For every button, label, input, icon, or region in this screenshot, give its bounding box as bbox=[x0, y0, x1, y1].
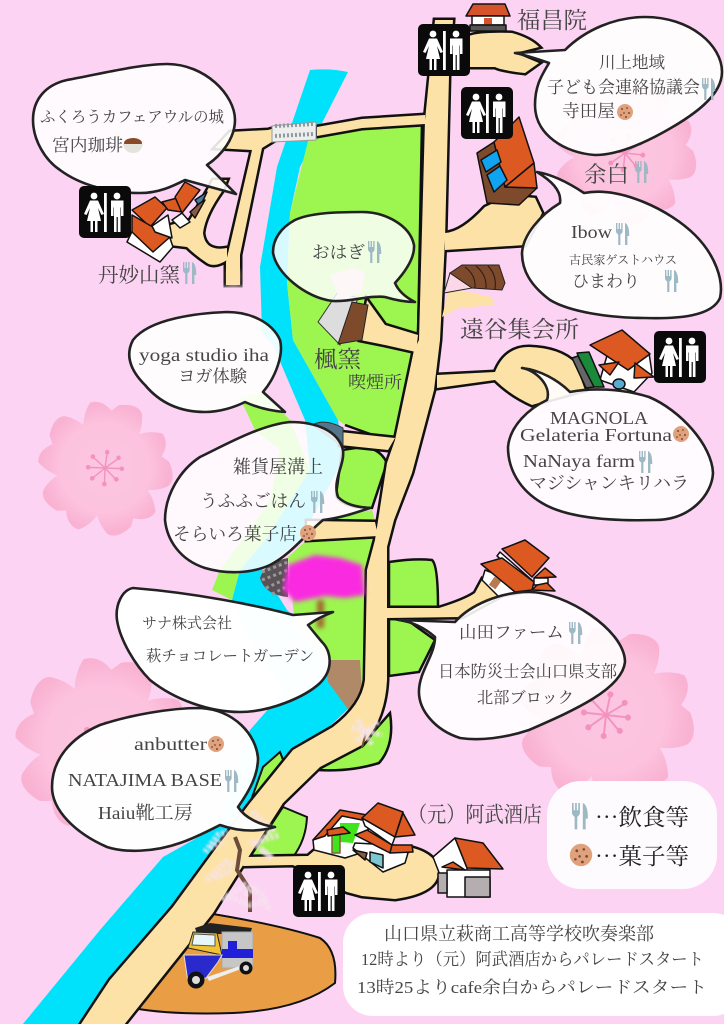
house: abu sake shop bbox=[313, 803, 415, 872]
text: zakka: 雑貨屋溝上 bbox=[233, 457, 323, 477]
text: sana: 萩チョコレートガーデン bbox=[146, 646, 314, 665]
bubble: ohagi bbox=[273, 212, 415, 302]
label: tanmyo kiln: 丹妙山窯 bbox=[98, 264, 180, 287]
green field: upper bbox=[287, 122, 425, 443]
text: yamada bbox=[438, 622, 617, 707]
text: magnola: NaNaya farm bbox=[523, 451, 635, 471]
legend panel bbox=[547, 781, 717, 889]
pink blurred tree bbox=[283, 555, 365, 628]
label: fukushoin: 福昌院 bbox=[517, 8, 587, 33]
road: to meeting hall bbox=[442, 288, 494, 317]
text: magnola: MAGNOLA bbox=[550, 408, 648, 428]
icon: restroom fukushoin bbox=[418, 24, 470, 76]
text: ibow: ひまわり bbox=[572, 272, 640, 291]
text: anbutter: Haiu靴工房 bbox=[98, 803, 193, 823]
text: kawakami bbox=[547, 53, 715, 121]
text: ohagi bbox=[312, 241, 381, 263]
road end fade bbox=[222, 270, 246, 292]
text: zakka: そらいろ菓子店 bbox=[173, 524, 297, 544]
text: owl cafe: ふくろうカフェアウルの城 bbox=[40, 108, 224, 126]
green field: left bank bbox=[212, 392, 310, 600]
text: sana: サナ株式会社 bbox=[142, 615, 232, 632]
green block right upper bbox=[389, 559, 438, 607]
text: magnola: マジシャンキリハラ bbox=[529, 473, 689, 493]
text: anbutter: anbutter bbox=[134, 734, 207, 754]
brown ground bbox=[325, 660, 362, 712]
label: smoking area: 喫煙所 bbox=[348, 373, 402, 392]
green field: middle bbox=[336, 447, 387, 508]
green field: lower with tree bbox=[288, 510, 380, 710]
label: yohaku: 余白 bbox=[584, 162, 629, 187]
house: yohaku bbox=[477, 117, 537, 205]
bubble: anbutter bbox=[52, 708, 275, 851]
label: abu sake shop: （元）阿武酒店 bbox=[408, 803, 542, 827]
green strip by river bbox=[250, 752, 285, 803]
text: kawakami: 川上地域 bbox=[599, 53, 666, 72]
info panel: parade: 12時より（元）阿武酒店からパレードスタート bbox=[361, 950, 704, 969]
legend panel: …飲食等 bbox=[595, 799, 689, 832]
icon: tuk-tuk bbox=[184, 923, 253, 988]
text: magnola bbox=[520, 408, 689, 493]
text: yamada: 日本防災士会山口県支部 bbox=[438, 662, 617, 681]
text: zakka: うふふごはん bbox=[200, 491, 306, 511]
text: anbutter: NATAJIMA BASE bbox=[68, 770, 222, 790]
text: sana bbox=[142, 615, 314, 665]
bubble: owl cafe bbox=[33, 64, 236, 194]
text: kawakami: 寺田屋 bbox=[562, 101, 615, 121]
icon: cherry blossom lower right bbox=[496, 611, 716, 826]
house: toya hall bbox=[444, 265, 505, 293]
text: kawakami: 子ども会連絡協議会 bbox=[547, 78, 700, 97]
text: owl cafe bbox=[40, 108, 224, 155]
icon: restroom yohaku bbox=[461, 87, 513, 139]
label: kaede kiln: 楓窯 bbox=[314, 347, 362, 372]
bubble: sana bbox=[117, 588, 333, 712]
bubble: zakka bbox=[165, 422, 370, 572]
bubble: kawakami bbox=[515, 17, 722, 155]
text: zakka bbox=[173, 457, 324, 544]
green block right lower bbox=[389, 618, 435, 676]
orange ground bbox=[133, 913, 335, 1013]
green block by bottom road bbox=[250, 807, 307, 857]
text: ohagi: おはぎ bbox=[312, 243, 365, 262]
text: magnola: Gelateria Fortuna bbox=[520, 425, 672, 445]
icon: dark stone mound bbox=[260, 558, 288, 597]
icon: cherry blossom lower left bbox=[0, 647, 208, 850]
bubble: yamada bbox=[399, 592, 625, 739]
cherry tree lower bbox=[205, 812, 280, 912]
info panel: parade bbox=[343, 913, 724, 1016]
icon: restroom magnola bbox=[654, 331, 706, 383]
text: yoga bbox=[139, 345, 269, 386]
house: storehouse bbox=[433, 838, 503, 897]
text: ibow: Ibow bbox=[571, 222, 612, 242]
house: magnola bbox=[572, 330, 654, 392]
legend panel: …菓子等 bbox=[595, 838, 689, 871]
bubble: magnola bbox=[508, 368, 713, 520]
text: ibow: 古民家ゲストハウス bbox=[569, 252, 677, 267]
road network bbox=[77, 20, 585, 1024]
cherry tree middle bbox=[352, 720, 382, 748]
house: yamada farm bbox=[481, 540, 556, 597]
house: tanmyo kiln bbox=[127, 182, 207, 262]
text: anbutter bbox=[68, 734, 238, 823]
house: kaede kiln bbox=[318, 268, 368, 345]
icon: restroom owl cafe bbox=[79, 186, 131, 238]
label: yohaku bbox=[584, 161, 648, 187]
icon: stone bridge bbox=[312, 422, 343, 448]
green block lower bbox=[317, 713, 391, 770]
info panel: parade: 13時25よりcafe余白からパレードスタート bbox=[357, 978, 707, 997]
bubble: yoga bbox=[129, 312, 285, 412]
text: yamada: 北部ブロック bbox=[477, 689, 574, 707]
bubble: ibow bbox=[522, 172, 721, 318]
text: yoga: yoga studio iha bbox=[139, 345, 269, 365]
text: yoga: ヨガ体験 bbox=[178, 367, 247, 386]
icon: cherry blossom upper right bbox=[536, 69, 714, 243]
house: fukushoin bbox=[466, 4, 510, 31]
info panel: parade: 山口県立萩商工高等学校吹奏楽部 bbox=[384, 924, 654, 944]
text: ibow bbox=[569, 222, 678, 292]
text: yamada: 山田ファーム bbox=[459, 623, 564, 642]
icon: restroom abu bbox=[293, 865, 345, 917]
text: owl cafe: 宮内珈琲 bbox=[52, 136, 123, 155]
icon: bridge top bbox=[272, 122, 316, 142]
river bbox=[18, 69, 350, 1024]
icon: cherry blossom left bbox=[25, 393, 185, 548]
label: toya hall: 遠谷集会所 bbox=[460, 317, 579, 342]
